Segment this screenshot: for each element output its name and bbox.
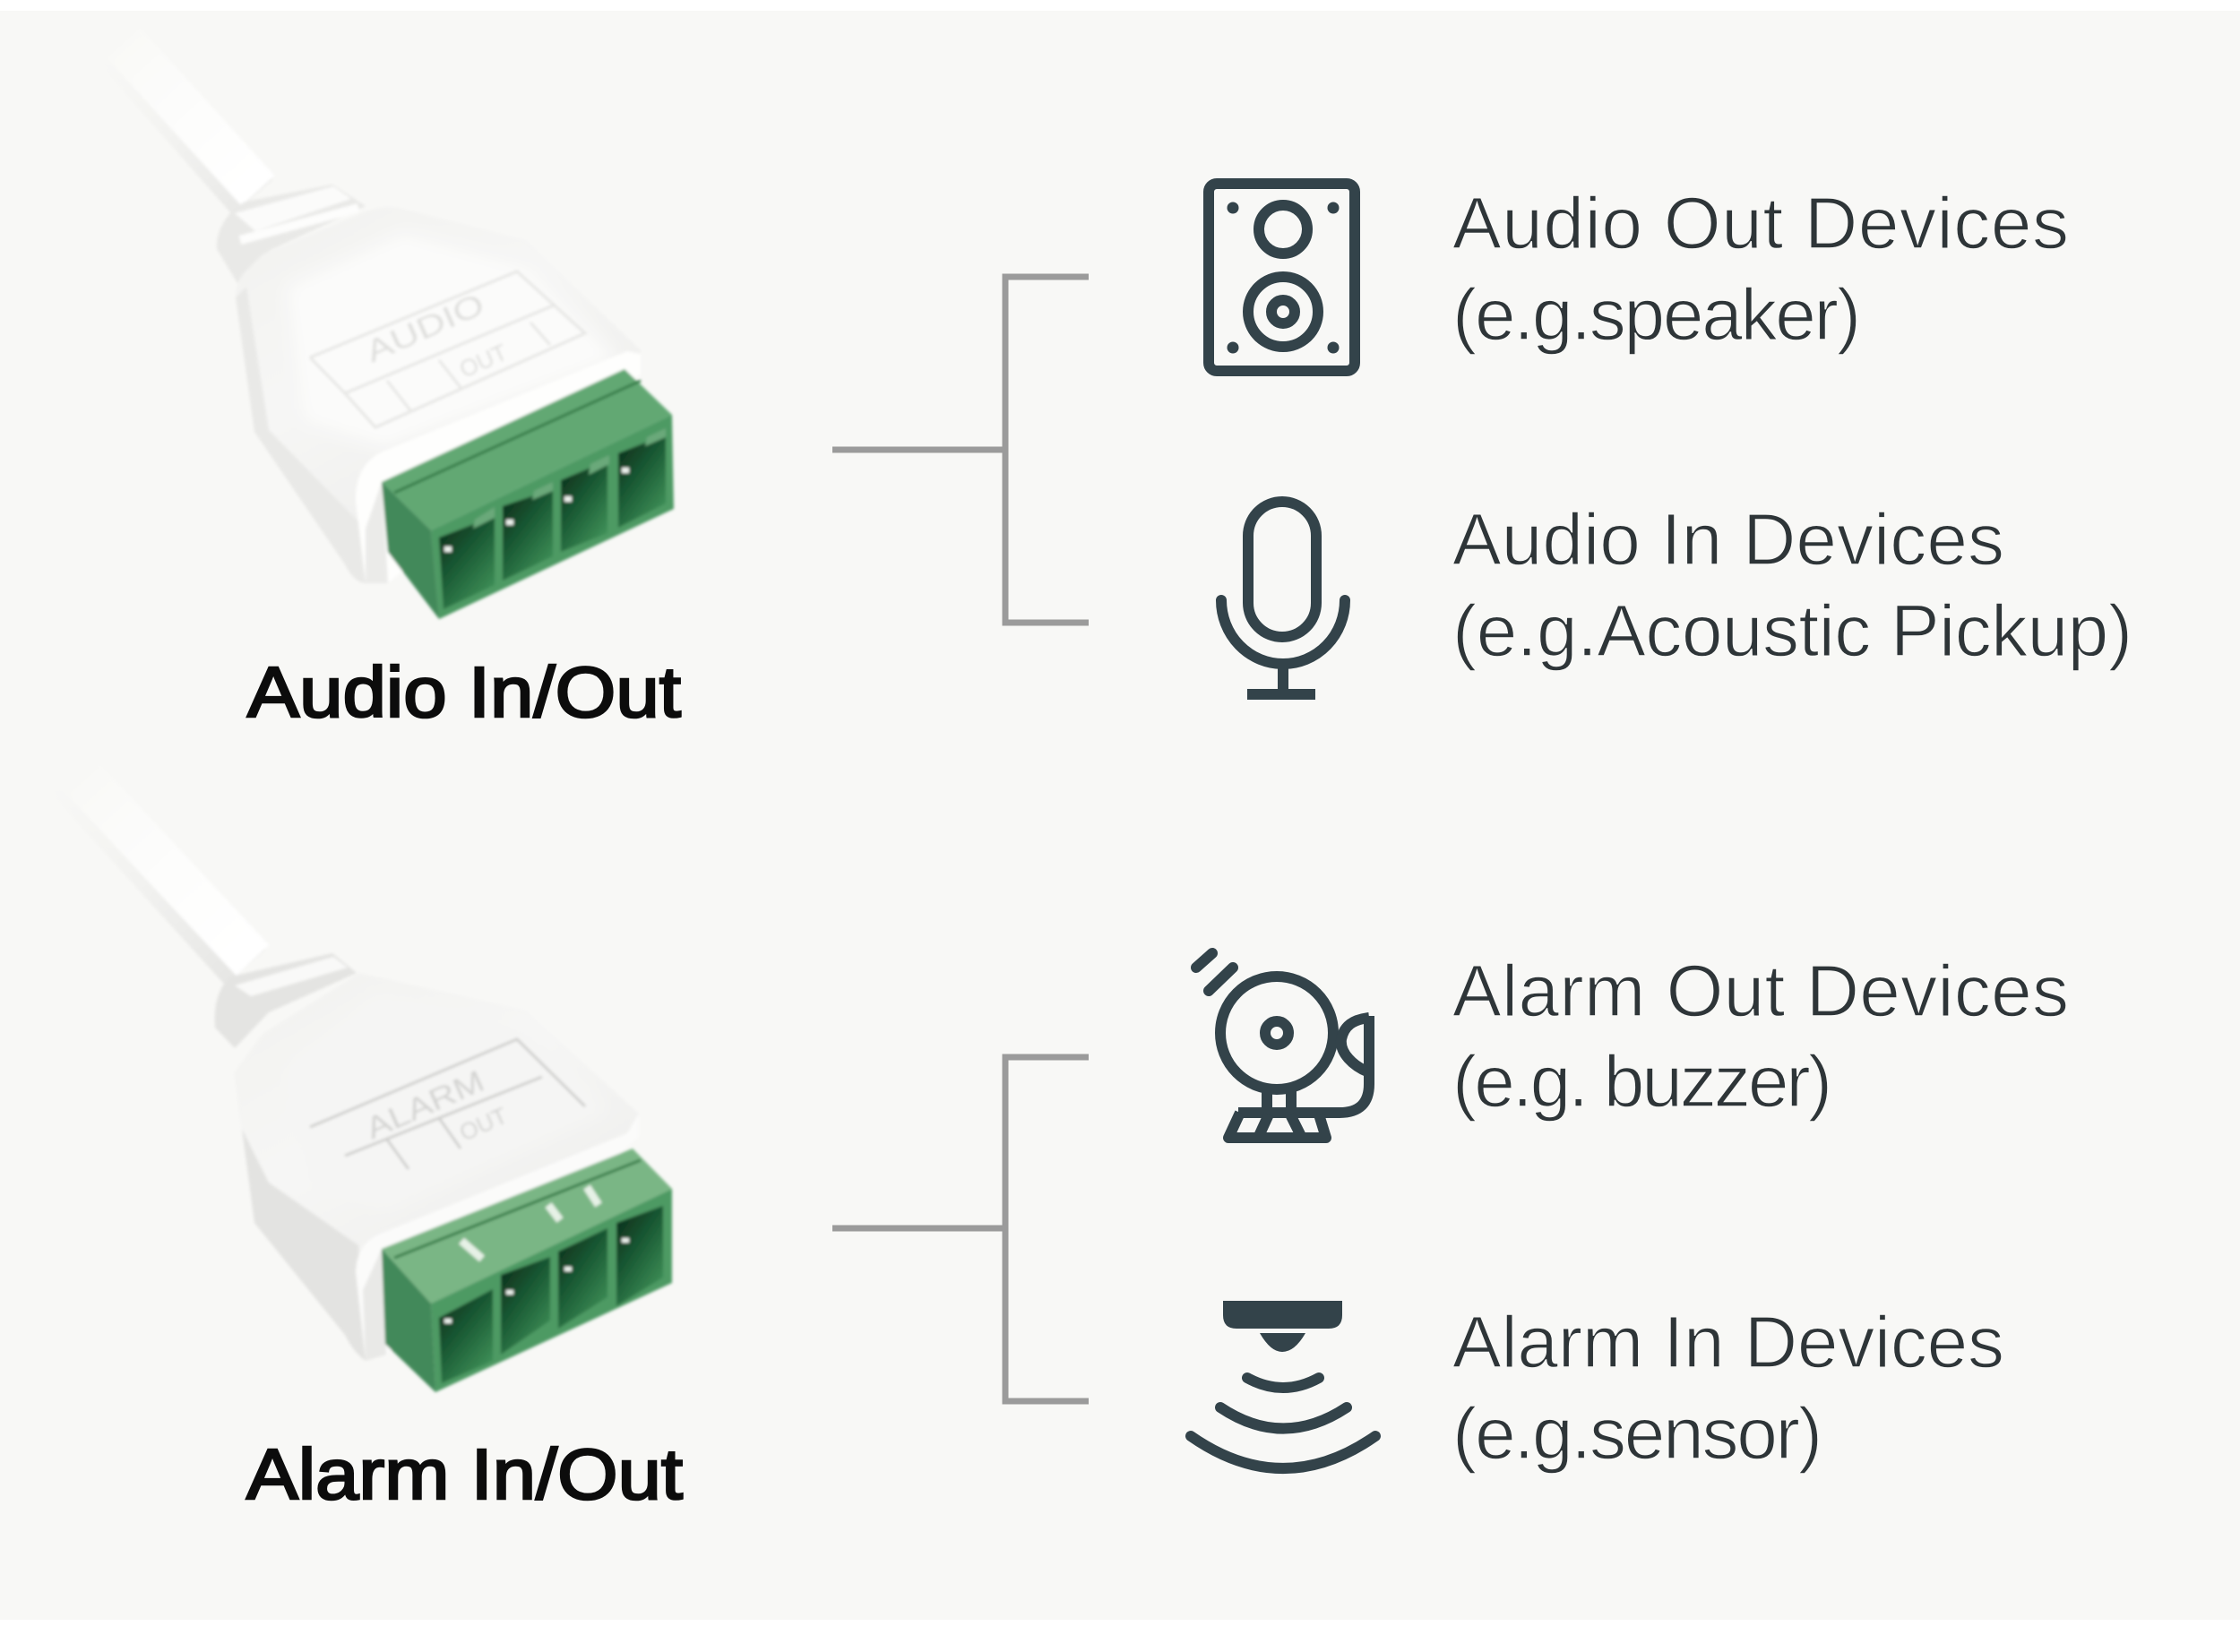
connector housing [234, 973, 639, 1361]
cable [66, 769, 253, 968]
text: audio in devices: Audio In Devices [1452, 499, 2004, 581]
embossed label: AUDIO [361, 288, 489, 369]
icon: buzzer [1196, 953, 1369, 1138]
green terminal front [431, 415, 674, 619]
text: audio out devices: Audio Out Devices [1452, 183, 2069, 264]
green terminal side [382, 482, 439, 619]
green terminal side [382, 1249, 435, 1392]
terminal slots [439, 1206, 663, 1383]
icon: sensor [1191, 1301, 1375, 1468]
text: audio in devices: (e.g.Acoustic Pickup) [1452, 590, 2132, 672]
embossed label: ALARM [361, 1064, 489, 1146]
text: alarm in devices: (e.g.sensor) [1452, 1393, 1822, 1475]
strain relief collar [215, 953, 357, 1048]
text: alarm out devices [1452, 951, 2069, 1123]
text: alarm in devices [1452, 1302, 2004, 1475]
embossed label [310, 271, 585, 427]
slot tabs [473, 428, 666, 529]
terminal slots [439, 435, 666, 609]
connector lines: alarm [832, 1057, 1089, 1401]
embossed label [310, 1039, 585, 1169]
embossed label: OUT [455, 339, 512, 383]
embossed label: OUT [455, 1102, 512, 1146]
connector: audio terminal block [118, 43, 674, 619]
text: alarm out devices: (e.g. buzzer) [1452, 1041, 1832, 1123]
text: audio out devices [1452, 183, 2069, 356]
icon: speaker [1209, 184, 1355, 371]
text: audio out devices: (e.g.speaker) [1452, 274, 1861, 356]
text: audio in devices [1452, 499, 2132, 672]
cable [118, 43, 258, 197]
strain relief collar [217, 185, 366, 283]
green terminal top [382, 1149, 672, 1304]
heading: audio: Audio In/Out [247, 652, 681, 732]
text: alarm out devices: Alarm Out Devices [1452, 951, 2069, 1032]
green terminal front [431, 1189, 672, 1392]
green terminal top [382, 369, 672, 530]
slot pins [444, 468, 629, 552]
icon: microphone [1221, 502, 1345, 694]
slot pins [444, 1238, 629, 1323]
heading: alarm: Alarm In/Out [246, 1434, 683, 1514]
text: alarm in devices: Alarm In Devices [1452, 1302, 2004, 1383]
connector housing [236, 207, 641, 583]
connector lines: audio [832, 277, 1089, 623]
connector: alarm terminal block [66, 769, 672, 1392]
